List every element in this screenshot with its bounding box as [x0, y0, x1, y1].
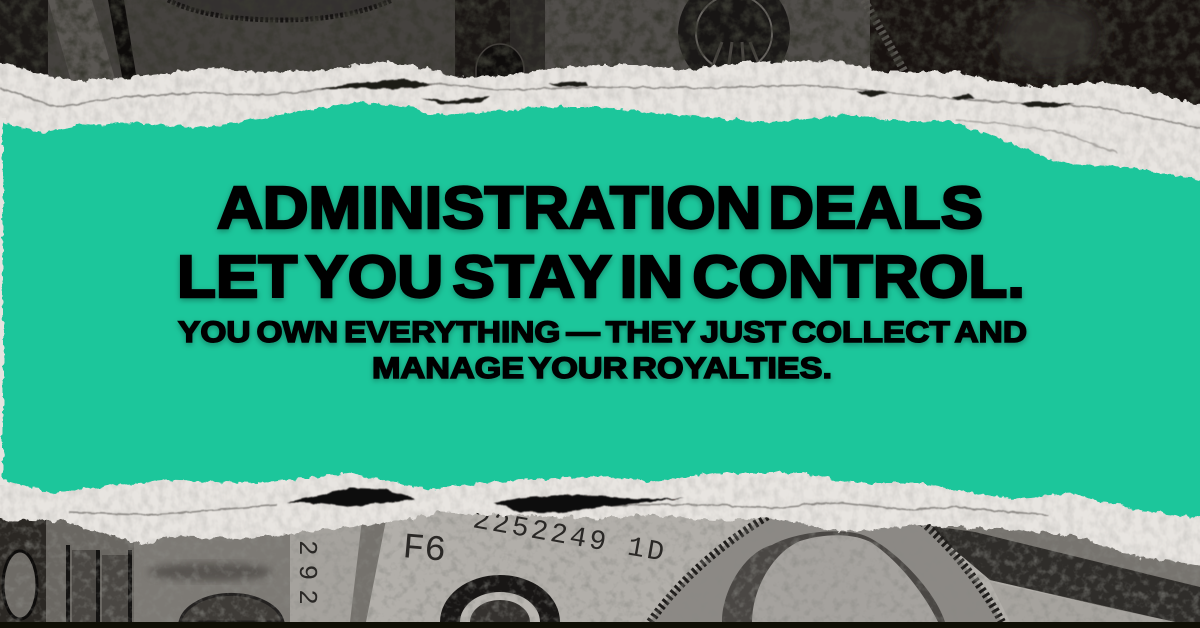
torn paper: bottom — [0, 440, 1200, 565]
teal panel — [0, 102, 1200, 517]
serial number text: 292 — [292, 540, 322, 614]
torn paper: top — [0, 61, 1200, 200]
background: bottom light dollar bill — [0, 500, 1200, 622]
serial number text: F6 — [401, 527, 448, 572]
subheading line 1: YOU OWN EVERYTHING — THEY JUST COLLECT AND — [178, 316, 1027, 349]
heading line 1: ADMINISTRATION DEALS — [217, 175, 983, 241]
top portrait oval beads — [864, 0, 906, 74]
top seal — [678, 0, 790, 89]
portrait oval — [650, 516, 1002, 622]
portrait bead border — [650, 516, 1002, 622]
serial number text: 2252249 1D — [470, 505, 669, 570]
top paper black tears — [314, 79, 1075, 107]
background: top dark dollar bill — [0, 0, 1200, 130]
heading and subheading — [177, 175, 1027, 385]
bottom paper crease lines — [69, 502, 1048, 515]
serial number text — [292, 505, 669, 614]
top paper crease lines — [0, 83, 1200, 153]
bottom paper black tears — [287, 488, 684, 513]
top large medallion beaded arc — [168, 0, 392, 20]
bottom right dark engraved band — [925, 515, 1200, 622]
bottom edge strip — [0, 622, 1200, 628]
heading line 2: LET YOU STAY IN CONTROL. — [177, 244, 1025, 310]
subheading line 2: MANAGE YOUR ROYALTIES. — [372, 352, 832, 385]
